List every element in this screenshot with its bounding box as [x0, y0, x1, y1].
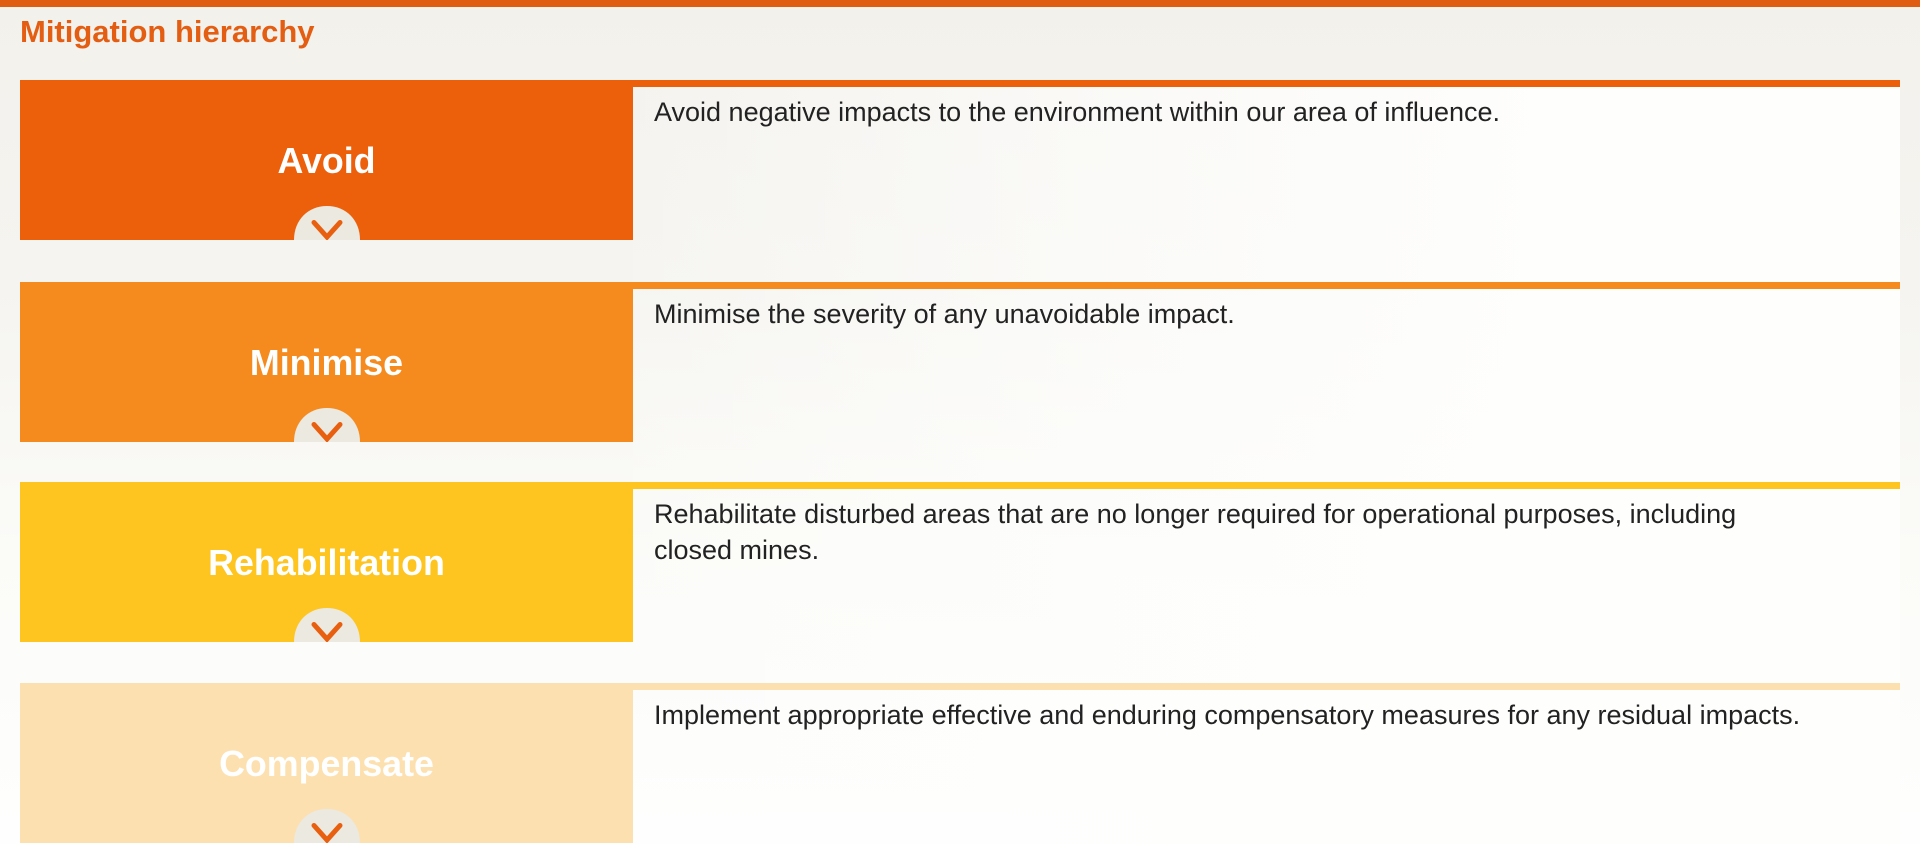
panel: avoid	[20, 80, 1900, 240]
label: rehabilitation: Rehabilitation	[208, 543, 445, 583]
title: Mitigation hierarchy	[20, 14, 315, 49]
label: minimise	[20, 282, 633, 442]
panel: compensate	[20, 683, 1900, 843]
text: minimise: Minimise the severity of any unavoidable impact.	[654, 299, 1235, 329]
label: rehabilitation	[20, 482, 633, 642]
panel: minimise	[20, 282, 1900, 442]
text: rehabilitation: Rehabilitate disturbed areas that are no longer required for operational purposes, including	[654, 499, 1736, 529]
label: minimise: Minimise	[250, 343, 403, 383]
label: compensate: Compensate	[219, 744, 434, 784]
top bar	[0, 0, 1920, 7]
label: avoid	[20, 80, 633, 240]
text column background	[633, 87, 1900, 844]
text: rehabilitation: closed mines.	[654, 535, 819, 565]
label: compensate	[20, 683, 633, 843]
panel: rehabilitation	[20, 482, 1900, 642]
text: rehabilitation	[654, 499, 1736, 565]
icon: chevron down	[294, 206, 360, 240]
icon: chevron down	[294, 809, 360, 843]
text: compensate: Implement appropriate effective and enduring compensatory measures for any residual impacts.	[654, 700, 1800, 730]
label: avoid: Avoid	[277, 141, 376, 181]
icon: chevron down	[294, 608, 360, 642]
text: avoid: Avoid negative impacts to the environment within our area of influence.	[654, 97, 1500, 127]
icon: chevron down	[294, 408, 360, 442]
